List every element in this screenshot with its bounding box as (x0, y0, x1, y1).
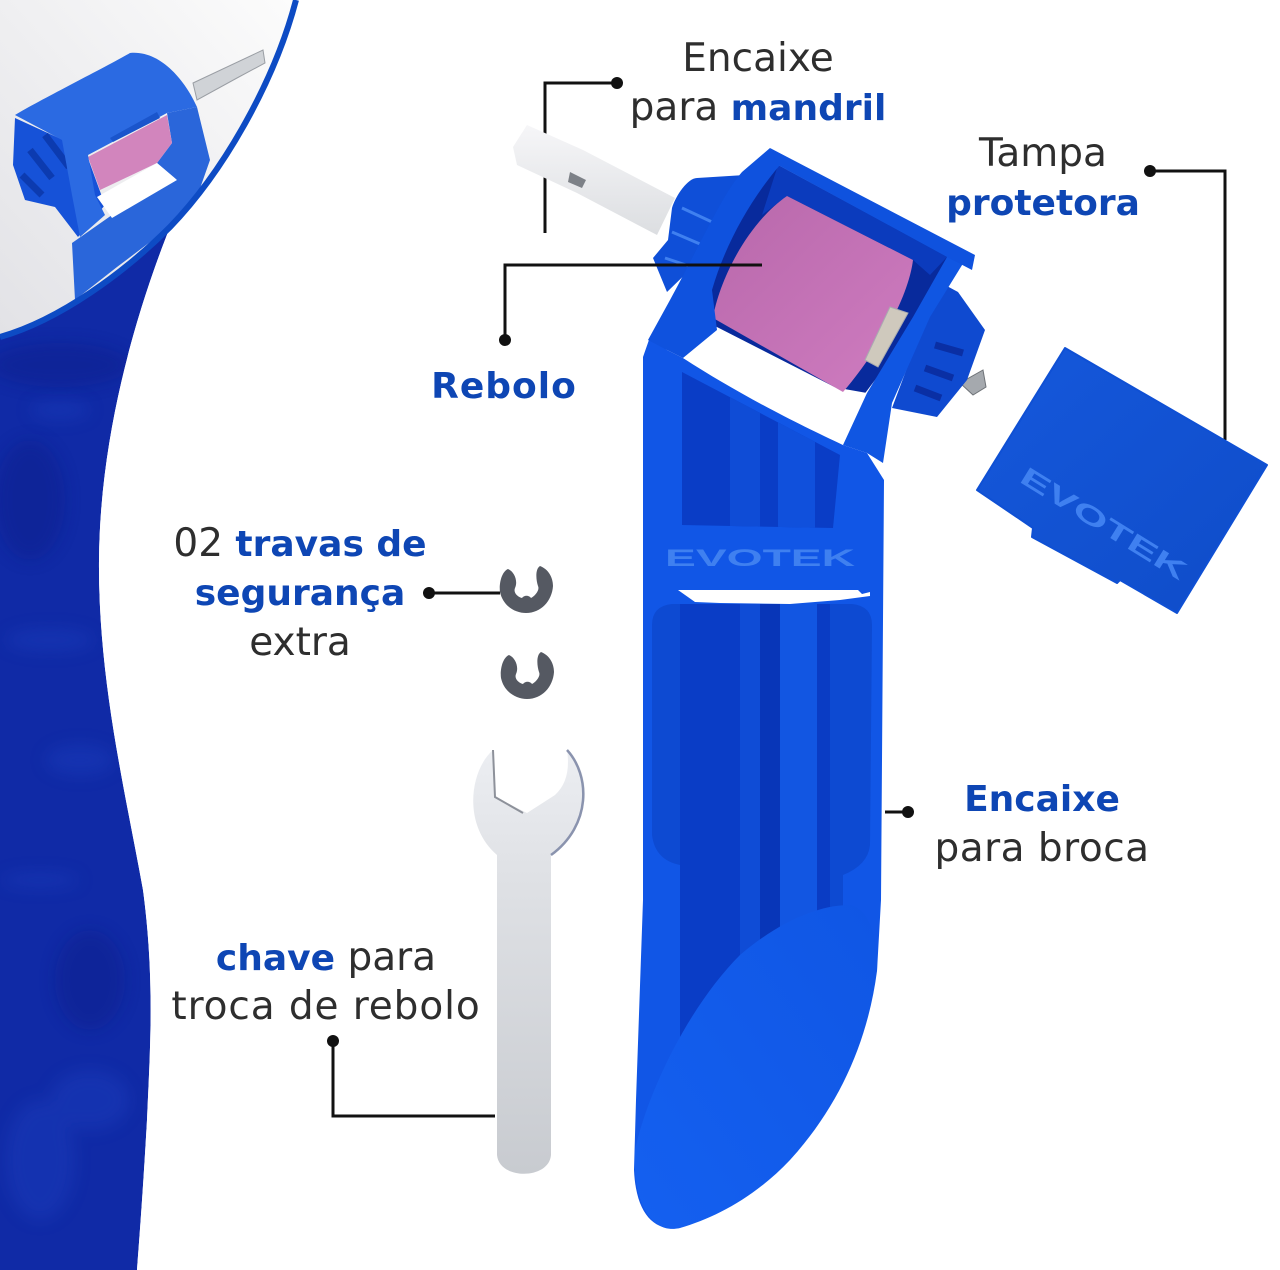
label: rebolo: Rebolo (431, 366, 577, 407)
left blue wave background (0, 227, 170, 1270)
label: encaixe para broca: Encaixe (964, 779, 1120, 820)
label: encaixe para mandril (630, 36, 886, 130)
label: encaixe para broca (934, 779, 1150, 871)
label: tampa protetora: Tampa (978, 131, 1107, 176)
label: travas de segurança: segurança (195, 573, 405, 614)
label: tampa protetora: protetora (946, 183, 1140, 224)
label: chave para troca de rebolo: troca de rebolo (171, 984, 481, 1029)
mandrel shank (513, 125, 675, 235)
label: travas de segurança (173, 521, 427, 665)
label: encaixe para mandril: Encaixe (682, 36, 834, 81)
spatula tip (635, 905, 877, 1229)
label: chave para troca de rebolo: chave para (216, 935, 436, 980)
slot opening (678, 590, 870, 604)
retaining clip upper (500, 566, 553, 613)
main sharpener body (634, 337, 884, 1229)
callout lines over objects (333, 265, 908, 1116)
wrench (473, 750, 585, 1174)
callout dots (327, 77, 1156, 1047)
logo: EVOTEK body: EVOTEK (665, 545, 856, 572)
label: travas de segurança: extra (249, 620, 351, 665)
grinding stone (713, 196, 913, 392)
nut and axle (865, 307, 986, 395)
callout line: encaixe para mandril (545, 83, 617, 233)
label: encaixe para broca: para broca (934, 826, 1150, 871)
retaining clip lower (501, 652, 554, 699)
inset photo: sharpener in use (0, 0, 296, 337)
frame arms and cover (648, 148, 985, 463)
protective cap: EVOTEK (1015, 461, 1193, 586)
label: encaixe para mandril: para mandril (630, 85, 886, 130)
protective cap (977, 348, 1267, 613)
label: chave para troca de rebolo (171, 935, 481, 1029)
label: tampa protetora (946, 131, 1140, 224)
grinding head housing (653, 165, 950, 445)
callout line: tampa protetora (1150, 171, 1225, 440)
label: travas de segurança: 02 travas de (173, 521, 427, 566)
